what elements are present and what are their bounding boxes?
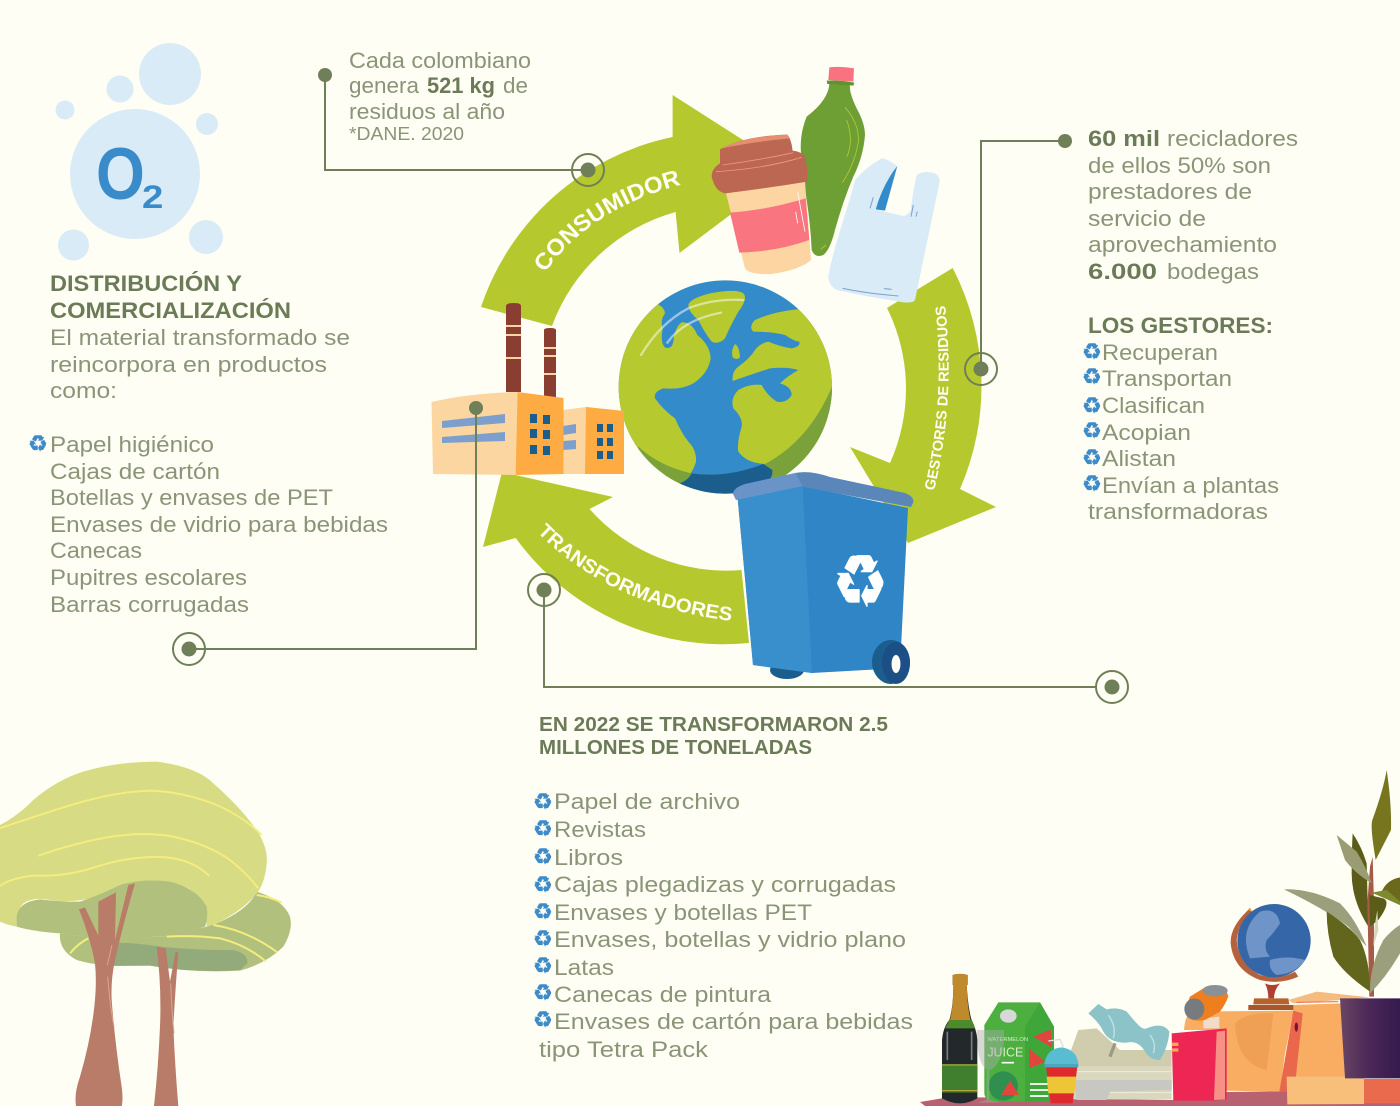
illustration: soda cup	[1044, 1039, 1078, 1103]
list: los gestores: ♻	[1082, 472, 1102, 497]
text block: material transformado	[50, 325, 350, 403]
illustration: paper stack and crushed plastic bottle	[1065, 1004, 1172, 1100]
list: materiales transformados: Cajas plegadizas y corrugadas	[554, 872, 896, 897]
illustration: desk globe	[1231, 904, 1311, 1010]
list: materiales transformados: ♻	[533, 873, 553, 898]
leader line: consumidor	[318, 68, 604, 186]
list: los gestores: Envían a plantas	[1102, 473, 1279, 498]
list: productos: Cajas de cartón	[50, 459, 220, 484]
illustration: recyclable objects	[920, 770, 1400, 1106]
list: materiales transformados: Revistas	[554, 817, 646, 842]
list: materiales transformados: Envases y botellas PET	[554, 900, 812, 925]
arrow: transformadores: TRANSFORMADORES	[540, 522, 732, 620]
list: productos: Botellas y envases de PET	[50, 485, 333, 510]
list: productos: Papel higiénico	[50, 432, 214, 457]
list: materiales transformados: ♻	[533, 954, 553, 979]
text block: residuos por colombiano: residuos al año	[349, 99, 505, 124]
text block: recicladores	[1088, 126, 1298, 284]
icon: green plastic bottle	[801, 67, 865, 256]
text block: residuos por colombiano: *DANE. 2020	[349, 124, 464, 144]
illustration: red book	[1172, 1028, 1227, 1101]
arrow: gestores de residuos	[850, 268, 996, 543]
heading: toneladas transformadas: MILLONES DE TONELADAS	[539, 737, 812, 759]
icon: earth globe	[618, 280, 832, 494]
list: productos: Pupitres escolares	[50, 565, 247, 590]
heading: toneladas transformadas	[539, 714, 888, 759]
list: los gestores	[1082, 313, 1279, 524]
icon: oxygen bubbles: O	[96, 134, 145, 215]
list: materiales transformados: ♻	[533, 927, 553, 952]
illustration: champagne bottle	[942, 974, 977, 1103]
icon: oxygen bubbles	[56, 43, 223, 260]
text block: recicladores: bodegas	[1167, 259, 1259, 284]
text block: residuos por colombiano: Cada colombiano	[349, 48, 531, 73]
illustration: juice carton	[984, 1002, 1054, 1102]
list: productos: ♻	[28, 432, 48, 457]
text block: material transformado: El material transformado se	[50, 325, 350, 350]
list: los gestores: Alistan	[1102, 446, 1176, 471]
list: productos: Canecas	[50, 538, 142, 563]
list: materiales transformados: Envases, botellas y vidrio plano	[554, 927, 906, 952]
list: materiales transformados: ♻	[533, 790, 553, 815]
list: materiales transformados: Envases de cartón para bebidas	[554, 1009, 913, 1034]
text block: recicladores: aprovechamiento	[1088, 232, 1277, 257]
list: materiales transformados	[533, 789, 913, 1062]
list: los gestores: ♻	[1082, 365, 1102, 390]
list: los gestores: Acopian	[1102, 420, 1191, 445]
leader line: distribución	[173, 401, 483, 665]
list: materiales transformados: ♻	[533, 817, 553, 842]
illustration: plant in pot	[1284, 770, 1400, 1078]
list: productos	[28, 432, 388, 617]
text block: recicladores: prestadores de	[1088, 179, 1252, 204]
heading: distribución y comercialización	[50, 271, 291, 323]
list: los gestores: ♻	[1082, 394, 1102, 419]
text block: recicladores: 6.000	[1088, 259, 1157, 284]
illustration: wine glass	[977, 1030, 1004, 1103]
text block: recicladores: de ellos 50% son	[1088, 153, 1271, 178]
leader line: transformadores	[528, 574, 1128, 703]
illustration: juice carton, glass, bottle and cup	[942, 974, 1078, 1103]
list: los gestores: LOS GESTORES:	[1088, 313, 1273, 338]
list: materiales transformados: ♻	[533, 845, 553, 870]
list: materiales transformados: ♻	[533, 981, 553, 1006]
icon: coffee cup	[712, 135, 811, 274]
list: materiales transformados: ♻	[533, 900, 553, 925]
list: los gestores: transformadoras	[1088, 499, 1268, 524]
list: materiales transformados: Latas	[554, 955, 614, 980]
text block: material transformado: como:	[50, 378, 117, 403]
text block: residuos por colombiano	[349, 48, 531, 144]
list: materiales transformados: Papel de archivo	[554, 789, 740, 814]
heading: toneladas transformadas: EN 2022 SE TRANSFORMARON 2.5	[539, 714, 888, 736]
text block: material transformado: reincorpora en productos	[50, 352, 327, 377]
list: los gestores: ♻	[1082, 340, 1102, 365]
list: materiales transformados: Canecas de pintura	[554, 982, 772, 1007]
list: los gestores: Clasifican	[1102, 393, 1205, 418]
text block: residuos por colombiano: de	[503, 73, 528, 98]
text block: recicladores: 60 mil	[1088, 126, 1160, 151]
text block: recicladores: recicladores	[1167, 126, 1298, 151]
text block: recicladores: servicio de	[1088, 206, 1206, 231]
list: los gestores: Transportan	[1102, 366, 1232, 391]
leader line: gestores	[965, 134, 1072, 385]
icon: factory	[432, 303, 624, 475]
list: materiales transformados: ♻	[533, 1008, 553, 1033]
illustration: juice carton: JUICE	[987, 1045, 1023, 1060]
arrow: gestores de residuos: GESTORES DE RESIDUOS	[925, 306, 949, 490]
illustration: trees	[0, 762, 291, 1106]
list: los gestores: Recuperan	[1102, 340, 1218, 365]
heading: distribución y comercialización: DISTRIBUCIÓN Y	[50, 271, 242, 296]
list: productos: Envases de vidrio para bebidas	[50, 512, 388, 537]
icon: oxygen bubbles: 2	[142, 180, 163, 215]
icon: recycling bin	[733, 472, 913, 684]
list: los gestores: ♻	[1082, 446, 1102, 471]
list: materiales transformados: tipo Tetra Pack	[539, 1037, 709, 1062]
icon: recycling bin: ♻	[832, 540, 888, 623]
arrow: consumidor	[481, 95, 745, 326]
arrow: consumidor: CONSUMIDOR	[536, 171, 681, 270]
list: los gestores: ♻	[1082, 419, 1102, 444]
illustration: juice carton: WATERMELON	[987, 1037, 1028, 1043]
text block: residuos por colombiano: 521 kg	[427, 73, 495, 98]
list: productos: Barras corrugadas	[50, 592, 249, 617]
illustration: boxes and books	[1184, 985, 1400, 1104]
list: materiales transformados: Libros	[554, 845, 623, 870]
arrow: transformadores	[483, 474, 749, 644]
heading: distribución y comercialización: COMERCIALIZACIÓN	[50, 298, 291, 323]
icon: plastic bag	[828, 158, 940, 303]
text block: residuos por colombiano: genera	[349, 73, 420, 98]
